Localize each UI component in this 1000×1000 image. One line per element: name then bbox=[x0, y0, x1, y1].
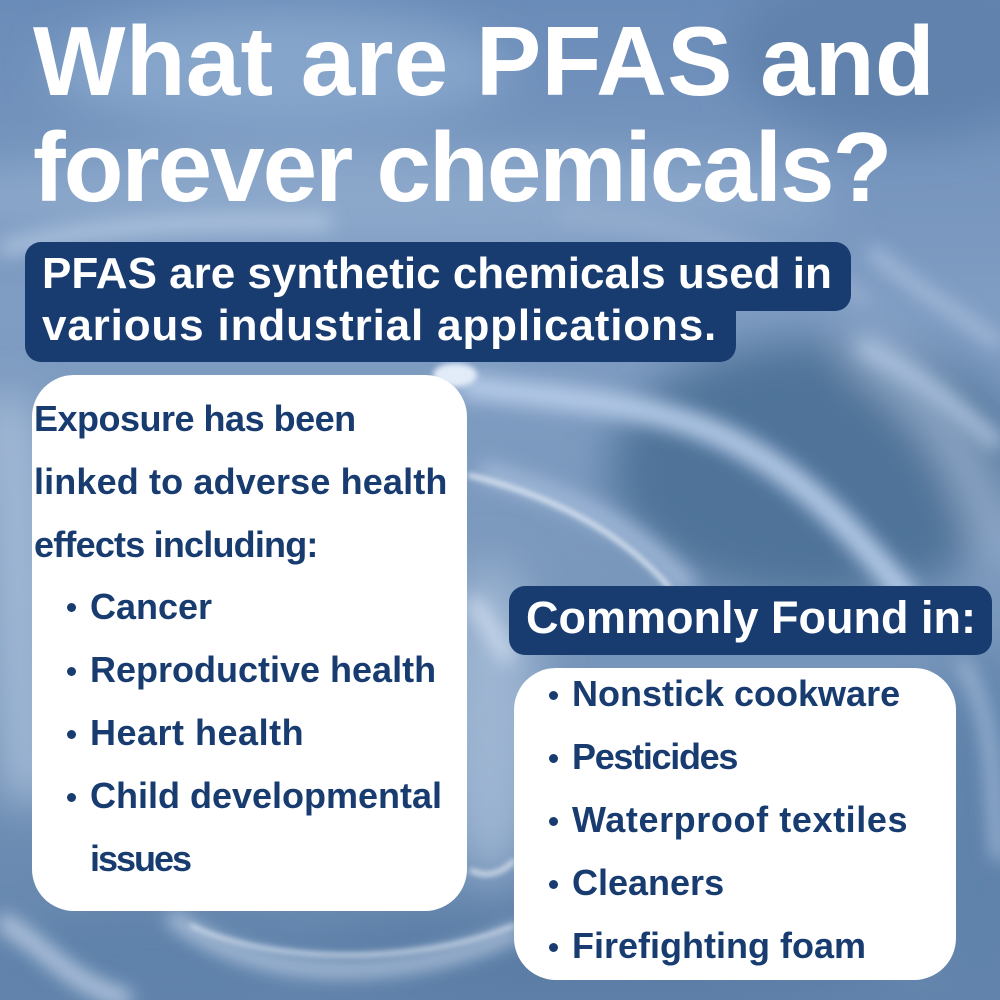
health list: Cancer bbox=[90, 586, 212, 627]
health intro text: Exposure has been bbox=[34, 398, 356, 439]
health intro text: effects including: bbox=[34, 524, 318, 565]
heading: commonly found in: Commonly Found in: bbox=[526, 592, 976, 643]
definition text: PFAS are synthetic chemicals used in bbox=[42, 249, 832, 298]
panel: found in list: Pesticides bbox=[572, 736, 737, 777]
panel: found in list: Cleaners bbox=[572, 862, 724, 903]
health list: Child developmental bbox=[90, 775, 442, 816]
panel: found in list: Firefighting foam bbox=[572, 925, 866, 966]
title: What are PFAS and bbox=[33, 6, 935, 116]
health intro text bbox=[34, 398, 448, 565]
panel: found in list: Nonstick cookware bbox=[572, 673, 900, 714]
health intro text: linked to adverse health bbox=[34, 461, 448, 502]
panel: found in list bbox=[514, 668, 956, 980]
heading: commonly found in bbox=[509, 586, 992, 655]
definition text bbox=[42, 249, 832, 350]
health list bbox=[67, 586, 442, 879]
health list: issues bbox=[90, 838, 190, 879]
definition text: various industrial applications. bbox=[42, 301, 717, 350]
title bbox=[33, 6, 935, 222]
panel: health effects bbox=[32, 375, 467, 911]
panel: definition bbox=[25, 242, 851, 362]
health list: Heart health bbox=[90, 712, 304, 753]
panel: found in list: Waterproof textiles bbox=[572, 799, 908, 840]
title: forever chemicals? bbox=[33, 112, 890, 222]
health list: Reproductive health bbox=[90, 649, 436, 690]
